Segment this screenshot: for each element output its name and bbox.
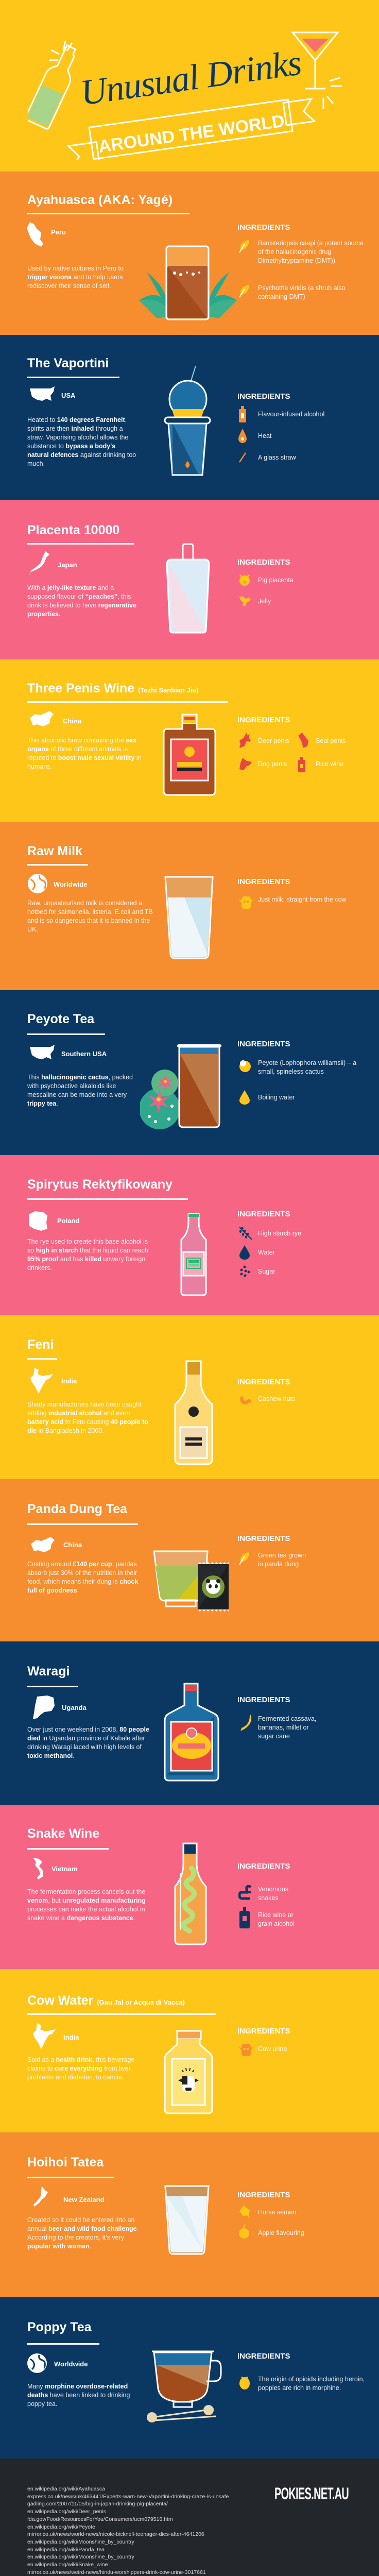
- description: This hallucinogenic cactus, packed with psychoactive alkaloids like mescaline can be made into a very trippy tea.: [27, 1074, 133, 1107]
- country: Southern USA: Southern USA: [61, 1050, 107, 1058]
- ingredient: cassava: bananas, millet or: [258, 1724, 309, 1731]
- ingredients: INGREDIENTS: [237, 1862, 290, 1871]
- ingredient: dog: Dog penis: [258, 760, 287, 768]
- illustration: spirytus bottle: [180, 1213, 207, 1296]
- ingredient: heat: [238, 429, 272, 443]
- ingredient: cow urine: [238, 2045, 367, 2054]
- panel: Placenta 10000: Placenta 10000: [27, 523, 119, 537]
- panel: Spirytus Rektyfikowany: [0, 1155, 379, 1315]
- ingredient: rice wine: grain alcohol: [258, 1920, 295, 1927]
- panel: Waragi: [0, 1641, 379, 1805]
- panel: Vaportini: [0, 335, 379, 500]
- sources list: gadling.com/2007/11/05/big-in-japan-drinking-pig-placenta/: [27, 2501, 168, 2507]
- description: Over just one weekend in 2008, 80 people died in Ugandan province of Kabale after drinking Waragi laced with high levels of toxic methanol.: [27, 1726, 149, 1759]
- header: [0, 0, 379, 172]
- country: Japan: [29, 551, 77, 576]
- panel: Panda Dung Tea: Panda Dung Tea: [27, 1502, 127, 1516]
- sources list: [27, 2485, 229, 2576]
- panel: Snake Wine: Snake Wine: [27, 1826, 99, 1841]
- description: Raw, unpasteurised milk is considered a hotbed for salmonella, listeria, E.coli and TB and is so dangerous that it is banned in the UK.: [27, 900, 153, 933]
- ingredient: straw: [239, 452, 296, 463]
- country: Peru: [27, 222, 66, 247]
- panel: Three Penis Wine: Three Penis Wine (Tezhi Sanbian Jiu): [27, 681, 199, 696]
- illustration: tea glass with cactus: [140, 1044, 221, 1129]
- description: The rye used to create this base alcohol is so high in starch that the liquid can reach 95% proof and has killed unwary foreign drinkers.: [27, 1238, 148, 1272]
- ingredient: milk: Just milk, straight from the cow: [258, 896, 347, 903]
- panel: Three Penis Wine: [0, 659, 379, 822]
- ingredient: boiling water: Boiling water: [258, 1094, 295, 1101]
- illustration: tea cup and panda packet: [152, 1550, 230, 1612]
- country: New Zealand: [32, 2186, 120, 2212]
- ingredient: cassava: Fermented cassava,: [258, 1715, 316, 1722]
- description: Many morphine overdose-related deaths have been linked to drinking poppy tea.: [27, 2383, 130, 2408]
- ingredients: INGREDIENTS: [237, 716, 290, 724]
- panel: Ayahuasca: [0, 172, 379, 335]
- panel: Snake Wine: [0, 1805, 379, 1969]
- logo: pokies.net.au: POKIES.NET.AU: [274, 2484, 349, 2503]
- illustration: square bottle: [163, 714, 216, 795]
- illustration: glass with leaves: [139, 245, 237, 320]
- description: Shady manufacturers have been caught adding industrial alcohol and even battery acid to Feni causing 40 people to die in Bangladesh in 2000.: [27, 1401, 148, 1434]
- ingredient: cashew: Cashew nuts: [258, 1395, 295, 1402]
- icon: martini glass: [290, 32, 342, 109]
- country: USA: USA: [61, 392, 75, 399]
- sources list: en.wikipedia.org/wiki/Deer_penis: [27, 2509, 106, 2515]
- country: Uganda: Uganda: [62, 1704, 87, 1711]
- ingredient: Banisteriopsis: Banisteriopsis caapi (a potent source of the hallucinogenic drug Dimethyltryptamine (DMT)): [258, 240, 364, 264]
- ingredient: snakes: snakes: [258, 1894, 279, 1902]
- description: This alcoholic brew containing the sex organs of three different animals is reputed to boost male sexual virility in humans.: [27, 737, 142, 770]
- sources list: mirror.co.uk/news/world-news/nicole-bicknell-teenager-dies-after-4641206: [27, 2531, 204, 2537]
- country: worldwide: Worldwide: [54, 880, 87, 888]
- panel: Spirytus Rektyfikowany: Spirytus Rektyfikowany: [27, 1177, 173, 1192]
- illustration: glass: [164, 2185, 210, 2255]
- panel: Cow Water: Cow Water (Gau Jal or Acqua di Vacca): [27, 1993, 185, 2008]
- illustration: snake bottle: [173, 1842, 208, 1945]
- ingredient: apple: [238, 2229, 367, 2238]
- ingredient: seal: Seal penis: [316, 737, 346, 744]
- illustration: waragi bottle: [163, 1683, 220, 1782]
- sources list: en.wikipedia.org/wiki/Moonshine_by_country: [27, 2554, 134, 2560]
- ingredient: rye: [239, 1227, 301, 1240]
- ingredients: INGREDIENTS: [237, 1040, 290, 1048]
- panel: Raw Milk: [0, 822, 379, 990]
- ingredient: rye: High starch rye: [258, 1230, 301, 1237]
- panel: Waragi: Waragi: [27, 1664, 70, 1679]
- country: Japan: Japan: [58, 561, 77, 569]
- ingredient: seal: [298, 733, 346, 748]
- ingredient: green tea: in panda dung: [258, 1561, 299, 1568]
- ingredients: INGREDIENTS: [237, 2191, 290, 2199]
- panel: Vaportini: The Vaportini: [27, 356, 109, 370]
- country: USA: [30, 386, 75, 401]
- ingredients: INGREDIENTS: [237, 877, 290, 886]
- heading: Ayahuasca (AKA: Yagé): [27, 193, 173, 207]
- ingredient: jelly: [239, 597, 271, 606]
- ingredient: dog: [239, 758, 287, 770]
- sources list: mirror.co.uk/news/weird-news/hindu-worshippers-drink-cow-urine-3017661: [27, 2569, 206, 2575]
- illustration: milk glass: [164, 876, 214, 959]
- description: Used by native cultures in Peru to trigger visions and to help users rediscover their sense of self.: [27, 265, 124, 290]
- ingredient: pig placenta: Pig placenta: [258, 577, 294, 584]
- description: Heated to 140 degrees Farenheit, spirits are then inhaled through a straw. Vaporising alcohol allows the substance to bypass a body's natural defences against drinking too much.: [27, 416, 136, 467]
- ingredient: rice wine: Rice wine or: [258, 1911, 294, 1919]
- country: New Zealand: New Zealand: [63, 2196, 104, 2204]
- ingredient: milk: [238, 896, 347, 909]
- description: Created so it could be entered into an annual beer and wild food challenge. According to the creators, it’s very popular with women.: [27, 2216, 139, 2250]
- illustration: feni bottle: [173, 1360, 214, 1466]
- country: China: China: [63, 717, 81, 725]
- country: China: China: [63, 1541, 82, 1549]
- ingredients: INGREDIENTS: [237, 1696, 290, 1704]
- country: Poland: [29, 1211, 79, 1231]
- ingredient: Psychotria: Psychotria viridis (a shrub also containing DMT): [258, 284, 346, 300]
- title: Unusual Drinks: Unusual Drinks: [78, 43, 303, 113]
- ingredient: boiling water: [239, 1090, 295, 1105]
- ribbon: around the world: [67, 98, 316, 160]
- ingredient: poppies: The origin of opioids including heroin, poppies are rich in morphine.: [258, 2376, 365, 2392]
- panel: Hoihoi Tatea: Hoihoi Tatea: [27, 2155, 104, 2170]
- ingredient: cassava: sugar cane: [258, 1733, 290, 1740]
- country: China: [30, 711, 81, 726]
- ingredient: sugar: Sugar: [258, 1268, 275, 1275]
- description: The fermentation process cancels out the venom, but unregulated manufacturing processes can make the actual alcohol in snake wine a dangerous substance.: [27, 1888, 146, 1922]
- panel: Feni: [0, 1315, 379, 1479]
- panel: Peyote Tea: Peyote Tea: [27, 1012, 94, 1026]
- ingredient: jelly: Jelly: [258, 598, 271, 605]
- ingredients: INGREDIENTS: [237, 2027, 290, 2036]
- ingredient: alcohol: Flavour-infused alcohol: [258, 411, 324, 418]
- description: Costing around £140 per cup, pandas absorb just 30% of the nutrition in their food, which means their dung is chock full of goodness.: [27, 1561, 138, 1594]
- ingredient: rice wine: Rice wine: [316, 760, 343, 768]
- description: Sold as a health drink, this beverage claims to cure everything from liver problems and diabetes, to cancer.: [27, 2056, 134, 2081]
- country: Vietnam: Vietnam: [51, 1865, 77, 1873]
- sources list: en.wikipedia.org/wiki/Panda_tea: [27, 2547, 105, 2553]
- ingredients: INGREDIENTS: [237, 1378, 290, 1386]
- country: India: India: [63, 2033, 79, 2041]
- sources list: en.wikipedia.org/wiki/Ayahuasca: [27, 2486, 105, 2492]
- sources list: en.wikipedia.org/wiki/Peyote: [27, 2524, 95, 2530]
- illustration: poppy tea cup: [146, 2350, 223, 2424]
- ingredient: deer: Deer penis: [258, 737, 289, 744]
- description: With a jelly-like texture and a supposed flavour of “peaches”, this drink is believed to have regenerative properties.: [27, 584, 136, 618]
- ingredient: snakes: Venomous: [258, 1886, 288, 1893]
- ingredient: cassava: [238, 1715, 367, 1741]
- sources list: en.wikipedia.org/wiki/Snake_wine: [27, 2562, 108, 2568]
- icon: bottle: [28, 41, 76, 130]
- country: Vietnam: [32, 1857, 99, 1883]
- country: Uganda: [32, 1694, 99, 1720]
- country: India: [32, 2023, 99, 2050]
- country: worldwide: [28, 874, 87, 893]
- ingredient: snakes: [238, 1885, 367, 1903]
- ingredients: INGREDIENTS: [237, 1534, 290, 1543]
- country: Poland: Poland: [57, 1217, 79, 1225]
- ingredient: water: [239, 1245, 275, 1260]
- panel: Peyote Tea: [0, 990, 379, 1155]
- panel: Feni: Feni: [27, 1337, 54, 1352]
- panel: Poppy Tea: Poppy Tea: [27, 2320, 92, 2334]
- ingredient: water: Water: [258, 1249, 275, 1256]
- country: worldwide: Worldwide: [54, 2360, 88, 2368]
- country: China: [30, 1537, 97, 1554]
- country: India: [29, 1368, 96, 1395]
- ingredient: horse: Horse semen: [258, 2209, 296, 2216]
- country: Southern USA: [30, 1045, 107, 1059]
- footer: [0, 2459, 379, 2576]
- illustration: cow jar: [163, 2030, 214, 2115]
- ingredients: INGREDIENTS: [237, 392, 290, 401]
- ingredient: green tea: Green tea grown: [258, 1552, 306, 1559]
- sources list: fda.gov/Food/ResourcesForYou/Consumers/ucm079516.htm: [27, 2516, 173, 2522]
- ingredient: deer: [239, 733, 289, 748]
- ingredient: rice wine: [298, 757, 343, 772]
- panel: Hoihoi Tatea: [0, 2132, 379, 2297]
- illustration: vaportini glass: [164, 366, 211, 476]
- ribbon: around the world: AROUND THE WORLD: [97, 111, 286, 157]
- panel: Cow Water: [0, 1969, 379, 2132]
- ingredient: cow urine: Cow urine: [258, 2045, 287, 2053]
- country: India: India: [61, 1377, 77, 1385]
- ingredient: green tea: [238, 1551, 367, 1569]
- ingredient: cashew: [238, 1395, 367, 1403]
- country: worldwide: [27, 2353, 104, 2375]
- ingredients: INGREDIENTS: [237, 2352, 290, 2361]
- ingredients: INGREDIENTS: [237, 223, 290, 232]
- ingredient: horse: [238, 2208, 367, 2217]
- ingredients: INGREDIENTS: [237, 1210, 290, 1218]
- ingredient: rice wine: [238, 1911, 367, 1928]
- panel: Placenta 10000: [0, 500, 379, 659]
- ingredient: sugar: [240, 1265, 275, 1277]
- sources list: express.co.uk/news/uk/463441/Experts-warn-new-Vaportini-drinking-craze-is-unsafe: [27, 2494, 229, 2500]
- country: Peru: Peru: [51, 228, 66, 236]
- illustration: jelly pouch: [166, 543, 210, 634]
- ingredient: apple: Apple flavouring: [258, 2229, 304, 2236]
- sources list: en.wikipedia.org/wiki/Moonshine_by_country: [27, 2539, 134, 2545]
- ingredient: heat: Heat: [258, 432, 271, 439]
- ingredient: alcohol: [239, 406, 324, 422]
- ingredients: INGREDIENTS: [237, 558, 290, 567]
- ingredient: peyote: Peyote (Lophophora williamsii) – a small, spineless cactus: [258, 1059, 356, 1075]
- panel: Poppy Tea: [0, 2297, 379, 2459]
- ingredient: pig placenta: [239, 574, 294, 586]
- panel: Panda Dung Tea: [0, 1479, 379, 1641]
- ingredient: straw: A glass straw: [258, 454, 296, 461]
- panel: Raw Milk: Raw Milk: [27, 844, 82, 858]
